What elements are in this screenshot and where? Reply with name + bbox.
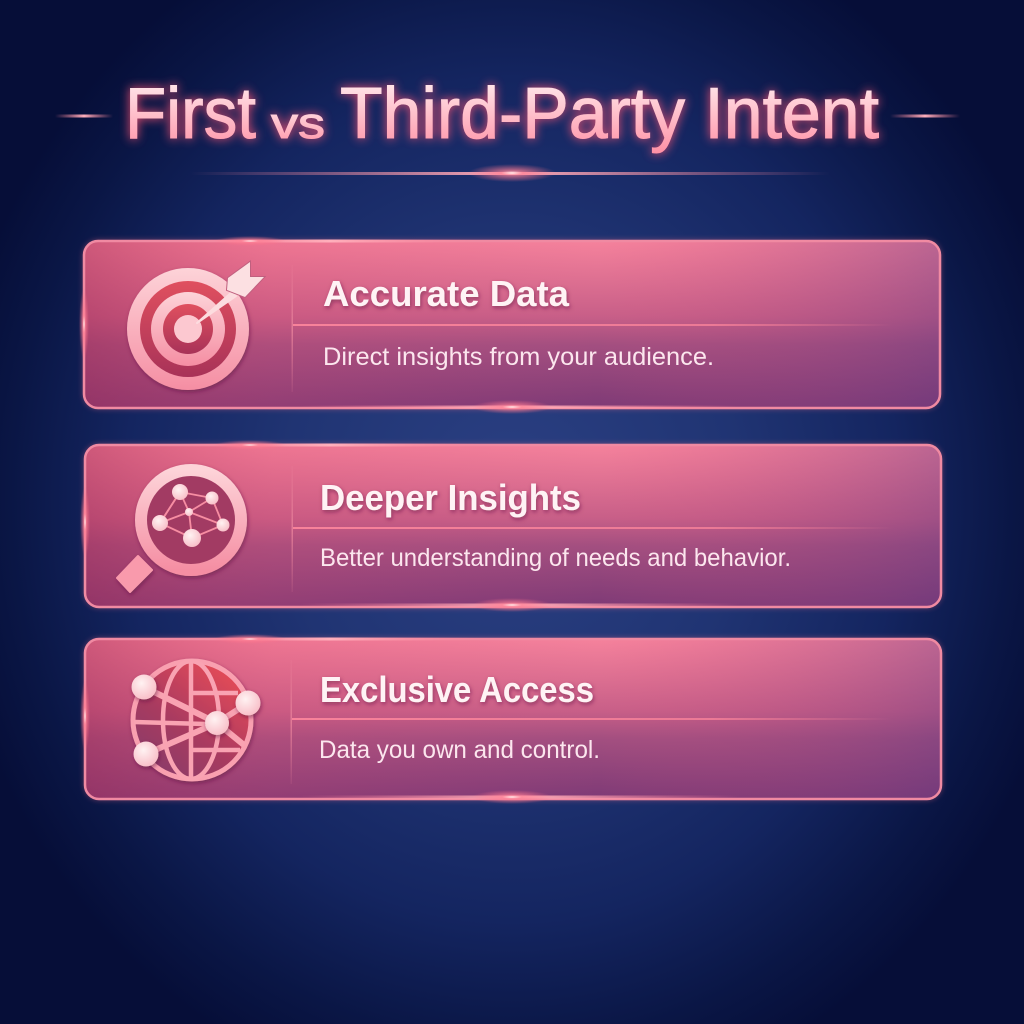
title: First: [125, 74, 256, 154]
icon: magnifier with network: [117, 470, 241, 592]
heading: deeper insights: Deeper Insights: [320, 477, 581, 518]
title: vs: [271, 99, 325, 148]
title: Third-Party Intent: [340, 74, 879, 154]
text: accurate data description: Direct insights from your audience.: [323, 343, 714, 371]
heading: exclusive access: Exclusive Access: [320, 669, 594, 710]
panel: accurate data: [79, 236, 941, 414]
title: First: [125, 74, 256, 154]
panel: exclusive access: [80, 634, 942, 804]
panel: deeper insights: [80, 440, 942, 612]
icon: target with arrow: [127, 262, 264, 390]
title: vs: [271, 99, 325, 148]
title: [125, 74, 879, 154]
title underline glow: [190, 164, 830, 182]
icon: globe network: [132, 661, 260, 779]
title: Third-Party Intent: [340, 74, 879, 154]
text: exclusive access description: Data you own and control.: [319, 736, 600, 764]
text: deeper insights description: Better understanding of needs and behavior.: [320, 544, 791, 572]
heading: accurate data: Accurate Data: [323, 273, 570, 314]
title side accents: [55, 114, 960, 118]
